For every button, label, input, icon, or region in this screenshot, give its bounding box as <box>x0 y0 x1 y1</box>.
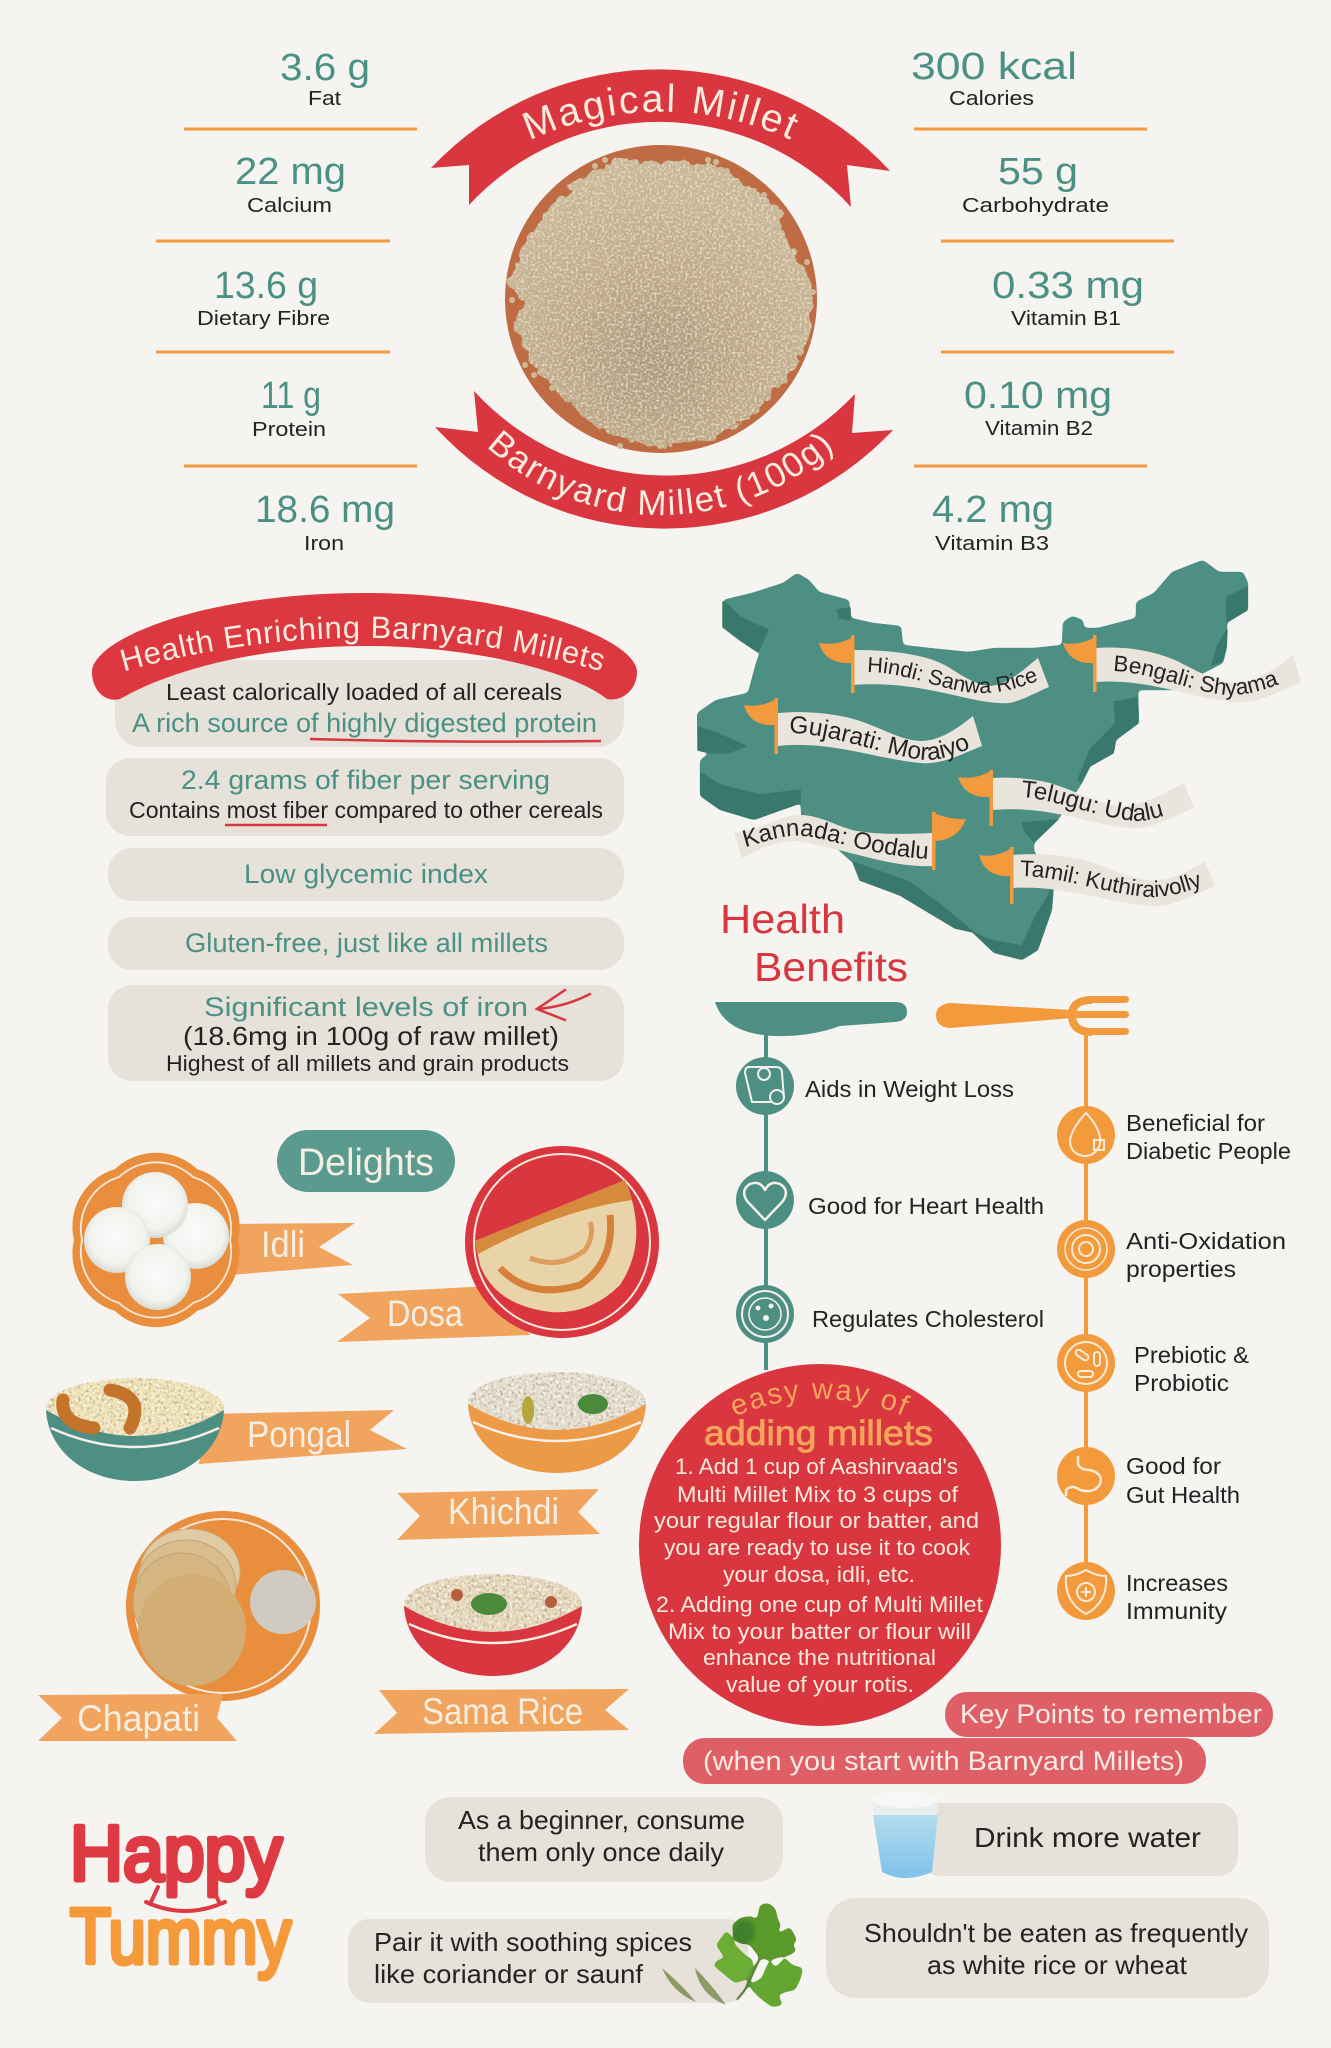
tip card: beginner <box>425 1797 783 1882</box>
tip card: frequency <box>826 1898 1269 1998</box>
text: immunity: Immunity <box>1126 1598 1228 1624</box>
icon: coriander sprig <box>713 1903 803 2007</box>
ribbon: Khichdi <box>397 1489 600 1540</box>
icon: sugar drop <box>1057 1106 1115 1164</box>
text: prebiotic <box>1134 1342 1249 1396</box>
ribbon: Sama Rice: Sama Rice <box>422 1691 583 1732</box>
ribbon: Telugu <box>958 770 1194 828</box>
tip card: spices: like coriander or saunf <box>374 1959 644 1989</box>
ribbon: Hindi <box>819 635 1049 704</box>
callout: easy way of adding millets <box>639 1364 1001 1726</box>
fifth card: iron: (18.6mg in 100g of raw millet) <box>183 1021 559 1051</box>
ribbon: Gujarati <box>744 698 982 764</box>
icon: bacteria <box>1057 1334 1115 1392</box>
icon: weight scale <box>736 1057 794 1115</box>
nutrition facts: right column: 0.33 mg <box>992 265 1144 307</box>
map of India with regional names <box>697 560 1301 960</box>
food: chapati <box>38 1511 320 1741</box>
callout: easy way of adding millets: you are ready to use it to cook <box>664 1535 971 1560</box>
callout: easy way of adding millets: 2. Adding one cup of Multi Millet <box>656 1592 983 1617</box>
tip card: water: Drink more water <box>974 1822 1201 1853</box>
first card: calories and protein: A rich source of highly digested protein <box>132 708 597 738</box>
food: pongal <box>46 1378 407 1481</box>
ribbon: Sama Rice <box>374 1689 629 1734</box>
fourth card: gluten-free <box>108 917 624 970</box>
nutrition facts: right column: Calories <box>949 88 1034 110</box>
nutrition facts: left column: Fat <box>308 88 341 110</box>
ribbon: Telugu: Telugu: Udalu <box>1022 780 1163 822</box>
ribbon: Dosa <box>337 1286 530 1342</box>
ribbon: Khichdi: Khichdi <box>448 1491 559 1532</box>
tip card: beginner: them only once daily <box>478 1837 724 1867</box>
food: idli <box>72 1153 355 1327</box>
tip card: water <box>872 1792 1238 1878</box>
callout: easy way of adding millets: Mix to your batter or flour will <box>668 1619 971 1644</box>
ribbon: Idli: Idli <box>261 1224 305 1265</box>
heading: Health Benefits: Benefits <box>754 944 908 990</box>
logo: Happy Tummy <box>70 1809 291 1980</box>
nutrition facts: right column: 55 g <box>998 151 1078 193</box>
heading pill: when you start with Barnyard Millets: (when you start with Barnyard Millets) <box>703 1746 1184 1776</box>
heading: Health Benefits: Health <box>720 896 845 942</box>
arrow: iron highlight <box>537 990 590 1020</box>
first card: calories and protein: Least calorically loaded of all cereals <box>166 679 562 705</box>
panel: health enriching benefits <box>92 593 637 1081</box>
text: diabetic: Diabetic People <box>1126 1138 1291 1164</box>
idli plate <box>72 1153 240 1327</box>
tip card: beginner: As a beginner, consume <box>458 1805 745 1835</box>
icon: saunf seeds <box>662 1968 726 2005</box>
heading pill: when you start with Barnyard Millets <box>683 1738 1206 1784</box>
nutrition facts: right column <box>911 46 1174 555</box>
text: anti-oxidation: properties <box>1126 1256 1236 1282</box>
ribbon: Gujarati: Gujarati: Moraiyo <box>790 716 968 762</box>
nutrition facts: right column: 300 kcal <box>911 46 1077 88</box>
logo: Happy Tummy: Happy <box>70 1809 282 1897</box>
text: prebiotic: Prebiotic & <box>1134 1342 1249 1368</box>
nutrition facts: right column: Vitamin B1 <box>1011 308 1121 330</box>
callout: easy way of adding millets: Multi Millet Mix to 3 cups of <box>677 1482 959 1507</box>
tip card: frequency: as white rice or wheat <box>927 1950 1188 1980</box>
ribbon: Bengali: Bengali: Shyama <box>1114 656 1279 700</box>
khichdi bowl <box>468 1372 646 1473</box>
ribbon: Kannada: Kannada: Oodalu <box>742 822 928 859</box>
ribbon: Chapati <box>38 1694 237 1741</box>
ribbon: Bengali <box>1063 635 1301 702</box>
millet plate <box>505 145 817 453</box>
ribbon: Tamil: Tamil: Kuthiraivolly <box>1020 860 1199 898</box>
second card: fiber: 2.4 grams of fiber per serving <box>181 765 550 795</box>
nutrition facts: left column: 3.6 g <box>280 47 370 89</box>
text: heart health: Good for Heart Health <box>808 1193 1044 1219</box>
logo: Happy Tummy: Tummy <box>70 1892 291 1980</box>
text: anti-oxidation: Anti-Oxidation <box>1126 1228 1286 1254</box>
icon: knife <box>715 1002 907 1036</box>
food: dosa <box>337 1146 659 1342</box>
text: weight loss: Aids in Weight Loss <box>805 1076 1014 1102</box>
nutrition facts: right column: 4.2 mg <box>932 489 1054 531</box>
second card: fiber <box>106 758 624 836</box>
first card: calories and protein <box>115 660 624 747</box>
heading pill: Key Points to remember: Key Points to remember <box>960 1699 1262 1729</box>
callout: easy way of adding millets: your dosa, idli, etc. <box>723 1562 915 1587</box>
callout: easy way of adding millets: enhance the nutritional <box>703 1645 936 1670</box>
heading pill: Delights: Delights <box>298 1142 434 1184</box>
nutrition facts: left column: 11 g <box>261 375 321 417</box>
text: immunity: Increases <box>1126 1570 1228 1596</box>
dosa plate <box>465 1146 659 1338</box>
fifth card: iron: Highest of all millets and grain products <box>166 1051 569 1076</box>
title ribbon: Magical Millet: Magical Millet <box>522 84 798 140</box>
callout: easy way of adding millets: value of your rotis. <box>726 1672 914 1697</box>
callout: easy way of adding millets: your regular flour or batter, and <box>654 1508 979 1533</box>
nutrition facts: left column: 22 mg <box>235 151 346 193</box>
icon: cholesterol artery <box>736 1285 794 1343</box>
nutrition facts: left column: Protein <box>252 419 326 441</box>
heading banner: Health Enriching Barnyard Millets <box>92 593 637 700</box>
ribbon: Idli <box>230 1223 355 1275</box>
text: diabetic: Beneficial for <box>1126 1110 1265 1136</box>
icon: shield <box>1057 1562 1115 1620</box>
text: gut health: Gut Health <box>1126 1482 1240 1508</box>
ribbon: Pongal <box>199 1410 407 1464</box>
ribbon: Pongal: Pongal <box>247 1414 351 1455</box>
text: prebiotic: Probiotic <box>1134 1370 1229 1396</box>
text: anti-oxidation <box>1126 1228 1286 1282</box>
text: cholesterol: Regulates Cholesterol <box>812 1306 1044 1332</box>
nutrition facts: right column: Vitamin B2 <box>985 418 1093 440</box>
timeline: knife with teal benefits <box>715 1002 1044 1370</box>
icon: fork <box>936 996 1129 1035</box>
callout: easy way of adding millets: easy way of <box>732 1383 912 1415</box>
nutrition facts: left column: Iron <box>304 533 344 555</box>
ribbon: Tamil <box>979 847 1215 906</box>
fifth card: iron: Significant levels of iron <box>204 992 528 1022</box>
nutrition facts: left column <box>156 47 417 555</box>
chapati plate <box>126 1511 320 1701</box>
ribbon: Dosa: Dosa <box>387 1293 463 1334</box>
callout: easy way of adding millets: adding millets <box>704 1414 933 1453</box>
heading banner: Health Enriching Barnyard Millets: Health Enriching Barnyard Millets <box>120 616 604 671</box>
food: khichdi <box>397 1372 646 1540</box>
map silhouette <box>697 560 1248 960</box>
ribbon: Chapati: Chapati <box>77 1698 200 1739</box>
nutrition facts: left column: Calcium <box>247 195 332 217</box>
heading pill: Key Points to remember <box>945 1692 1273 1737</box>
third card: glycemic index: Low glycemic index <box>244 859 489 889</box>
tip card: spices <box>348 1903 803 2007</box>
subtitle ribbon: Barnyard Millet (100g) <box>435 391 893 529</box>
timeline: fork with orange benefits <box>936 996 1291 1624</box>
sama rice bowl <box>404 1574 582 1676</box>
third card: glycemic index <box>108 848 624 901</box>
heading: Health Benefits <box>720 896 908 990</box>
callout: easy way of adding millets: 1. Add 1 cup of Aashirvaad's <box>675 1454 958 1479</box>
text: gut health <box>1126 1453 1240 1508</box>
nutrition facts: right column: Carbohydrate <box>962 195 1109 217</box>
fifth card: iron <box>108 985 624 1081</box>
tip card: frequency: Shouldn't be eaten as frequently <box>864 1918 1248 1948</box>
second card: fiber: Contains most fiber compared to other cereals <box>129 797 603 823</box>
heading pill: Delights <box>277 1130 455 1192</box>
subtitle ribbon: Barnyard Millet (100g): Barnyard Millet (100g) <box>488 430 833 516</box>
food: sama rice <box>374 1574 629 1734</box>
nutrition facts: left column: 13.6 g <box>214 265 318 307</box>
text: gut health: Good for <box>1126 1453 1221 1479</box>
tip card: spices: Pair it with soothing spices <box>374 1927 692 1957</box>
map relief shading <box>698 587 1247 959</box>
ribbon: Hindi: Hindi: Sanwa Rice <box>868 657 1037 694</box>
icon: stomach <box>1057 1447 1115 1505</box>
text: diabetic <box>1126 1110 1291 1164</box>
nutrition facts: right column: Vitamin B3 <box>935 533 1049 555</box>
fourth card: gluten-free: Gluten-free, just like all millets <box>185 928 548 958</box>
nutrition facts: left column: 18.6 mg <box>255 489 395 531</box>
icon: heart <box>736 1171 794 1229</box>
nutrition facts: left column: Dietary Fibre <box>197 308 330 330</box>
text: immunity <box>1126 1570 1228 1624</box>
icon: molecule <box>1057 1220 1115 1278</box>
title ribbon: Magical Millet <box>431 69 890 207</box>
pongal bowl <box>46 1378 224 1481</box>
icon: glass of water <box>872 1792 938 1878</box>
nutrition facts: right column: 0.10 mg <box>964 375 1112 417</box>
